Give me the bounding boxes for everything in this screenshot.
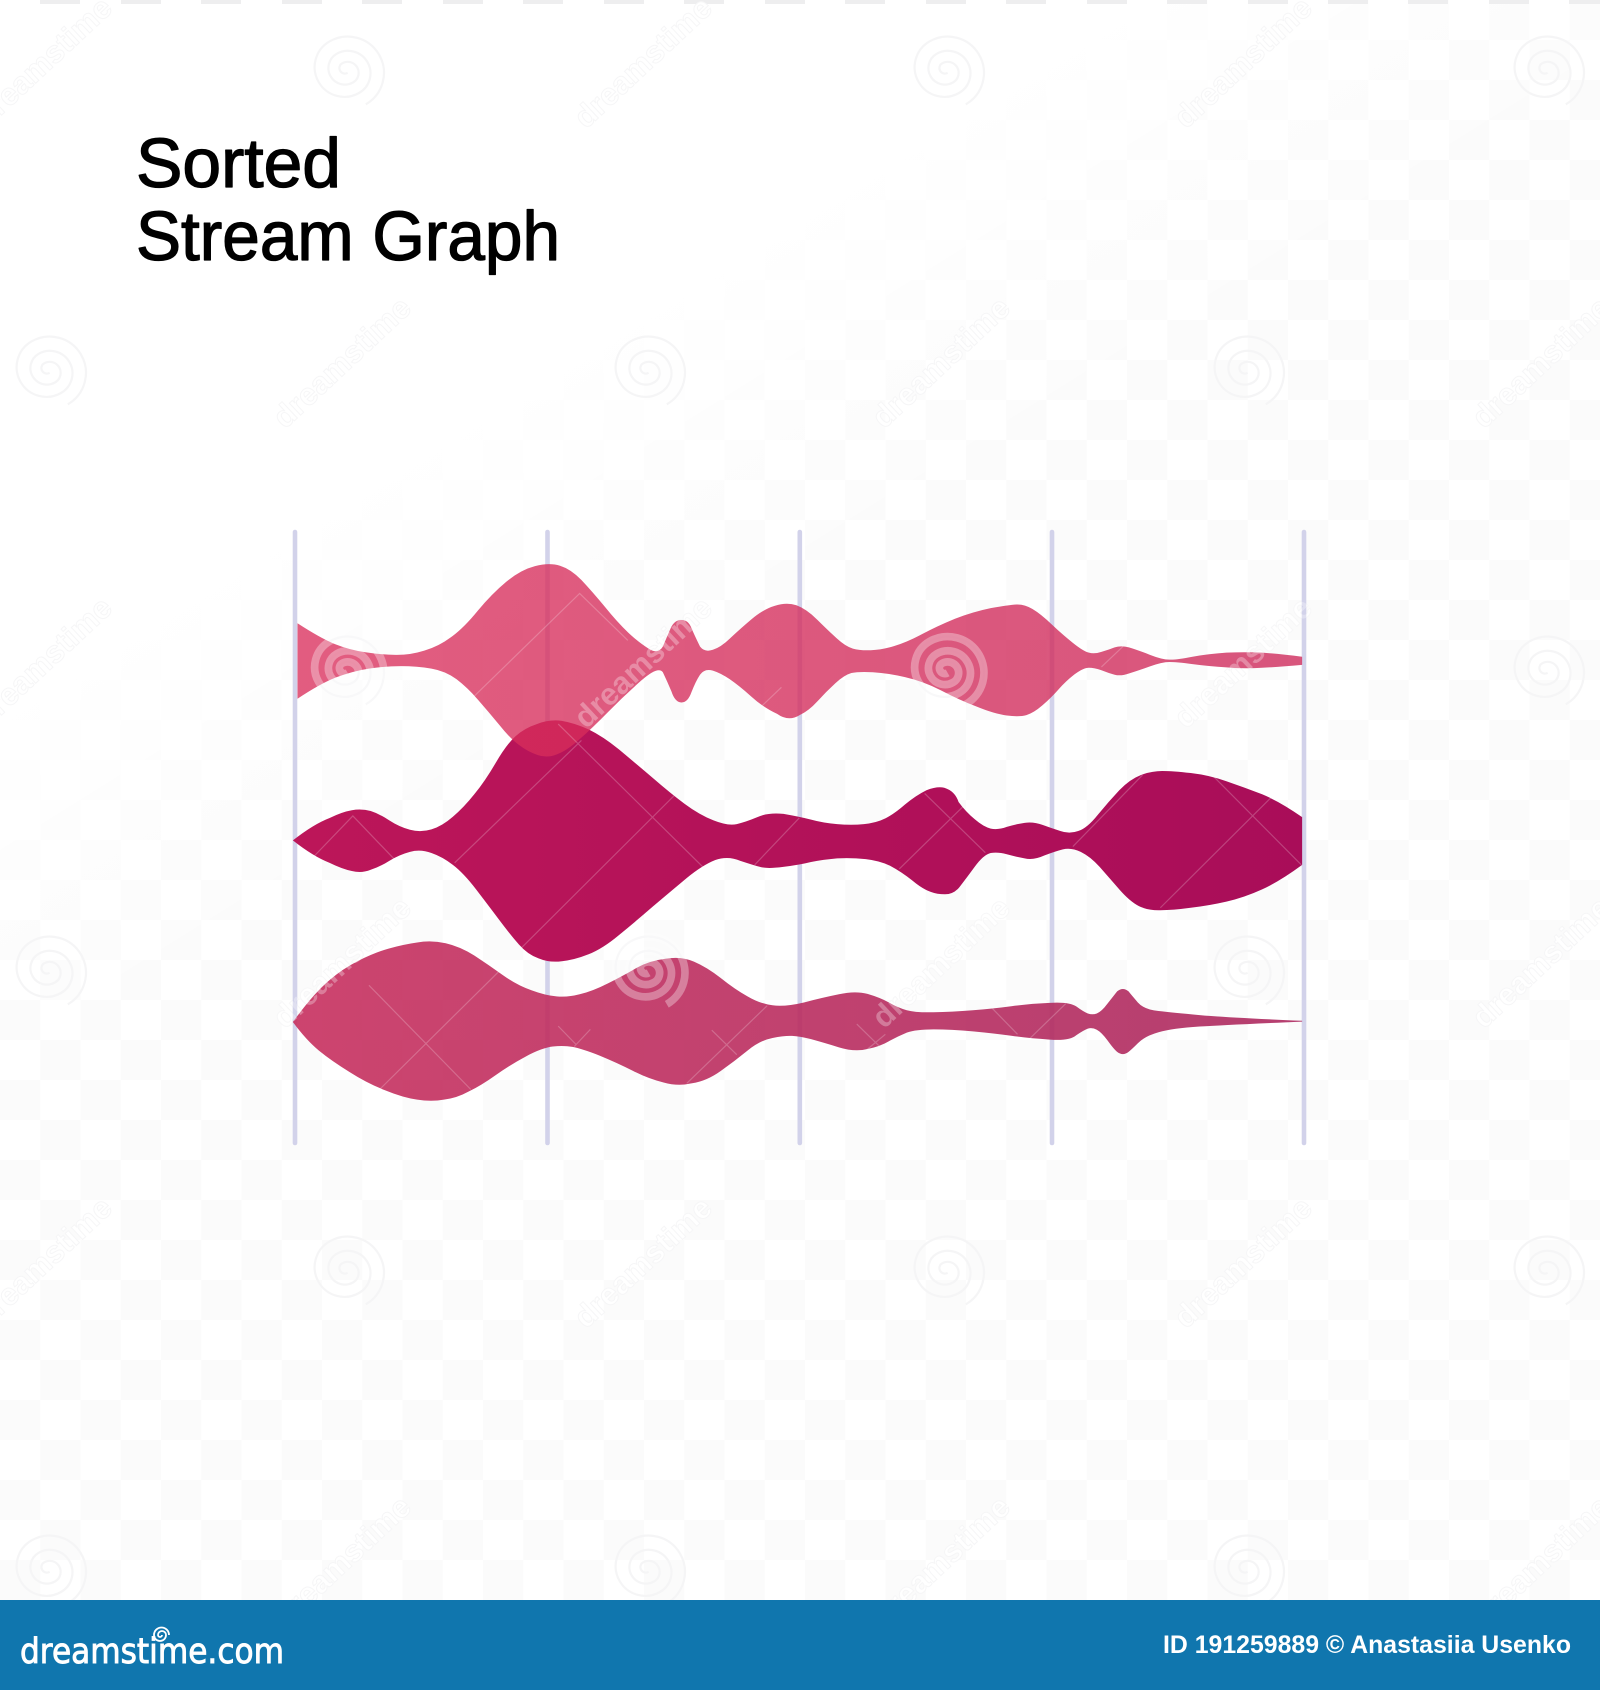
watermark overlay on the streams: dreamstime [266, 890, 418, 1035]
watermark overlay on the streams: dreamstime [567, 590, 719, 735]
stream: bottom, rose [293, 941, 1302, 1101]
chart: stream graph [293, 532, 1304, 1143]
streams, drawn in zoomed coordinates [293, 564, 1302, 1101]
footer credit: ID 191259889 © Anastasiia Usenko [1163, 1631, 1571, 1659]
watermark overlay on the streams: dreamstime [1167, 590, 1319, 735]
watermark pattern: faint spirals and wordmarks: dreamstime [266, 290, 418, 435]
watermark pattern: faint spirals and wordmarks: dreamstime [567, 1190, 719, 1335]
time axis lines [295, 532, 1304, 1143]
watermark pattern: faint spirals and wordmarks: dreamstime [1167, 1190, 1319, 1335]
top edge strip of checker [40, 0, 1600, 4]
title [136, 124, 560, 275]
footer bar [0, 1600, 1600, 1690]
watermark pattern: faint spirals and wordmarks: dreamstime [266, 890, 418, 1035]
watermark overlay on the streams [266, 590, 1319, 1089]
title: Stream Graph [136, 197, 560, 275]
watermark overlay on the streams: dreamstime [865, 890, 1017, 1035]
watermark pattern: faint spirals and wordmarks: dreamstime [865, 290, 1017, 435]
watermark pattern: faint spirals and wordmarks: dreamstime [865, 890, 1017, 1035]
watermark pattern: faint spirals and wordmarks: dreamstime [567, 590, 719, 735]
stream: middle, dark magenta [293, 720, 1302, 962]
stream: top, light pink [297, 564, 1302, 757]
watermark pattern: faint spirals and wordmarks: dreamstime [1167, 590, 1319, 735]
watermark pattern: faint spirals and wordmarks: dreamstime [266, 1489, 418, 1634]
title: Sorted [136, 124, 341, 202]
watermark pattern: faint spirals and wordmarks: dreamstime [865, 1489, 1017, 1634]
icon: spiral above the logo [154, 1628, 169, 1641]
footer logo: dreamstime.com: dreamstime.com [20, 1632, 284, 1672]
